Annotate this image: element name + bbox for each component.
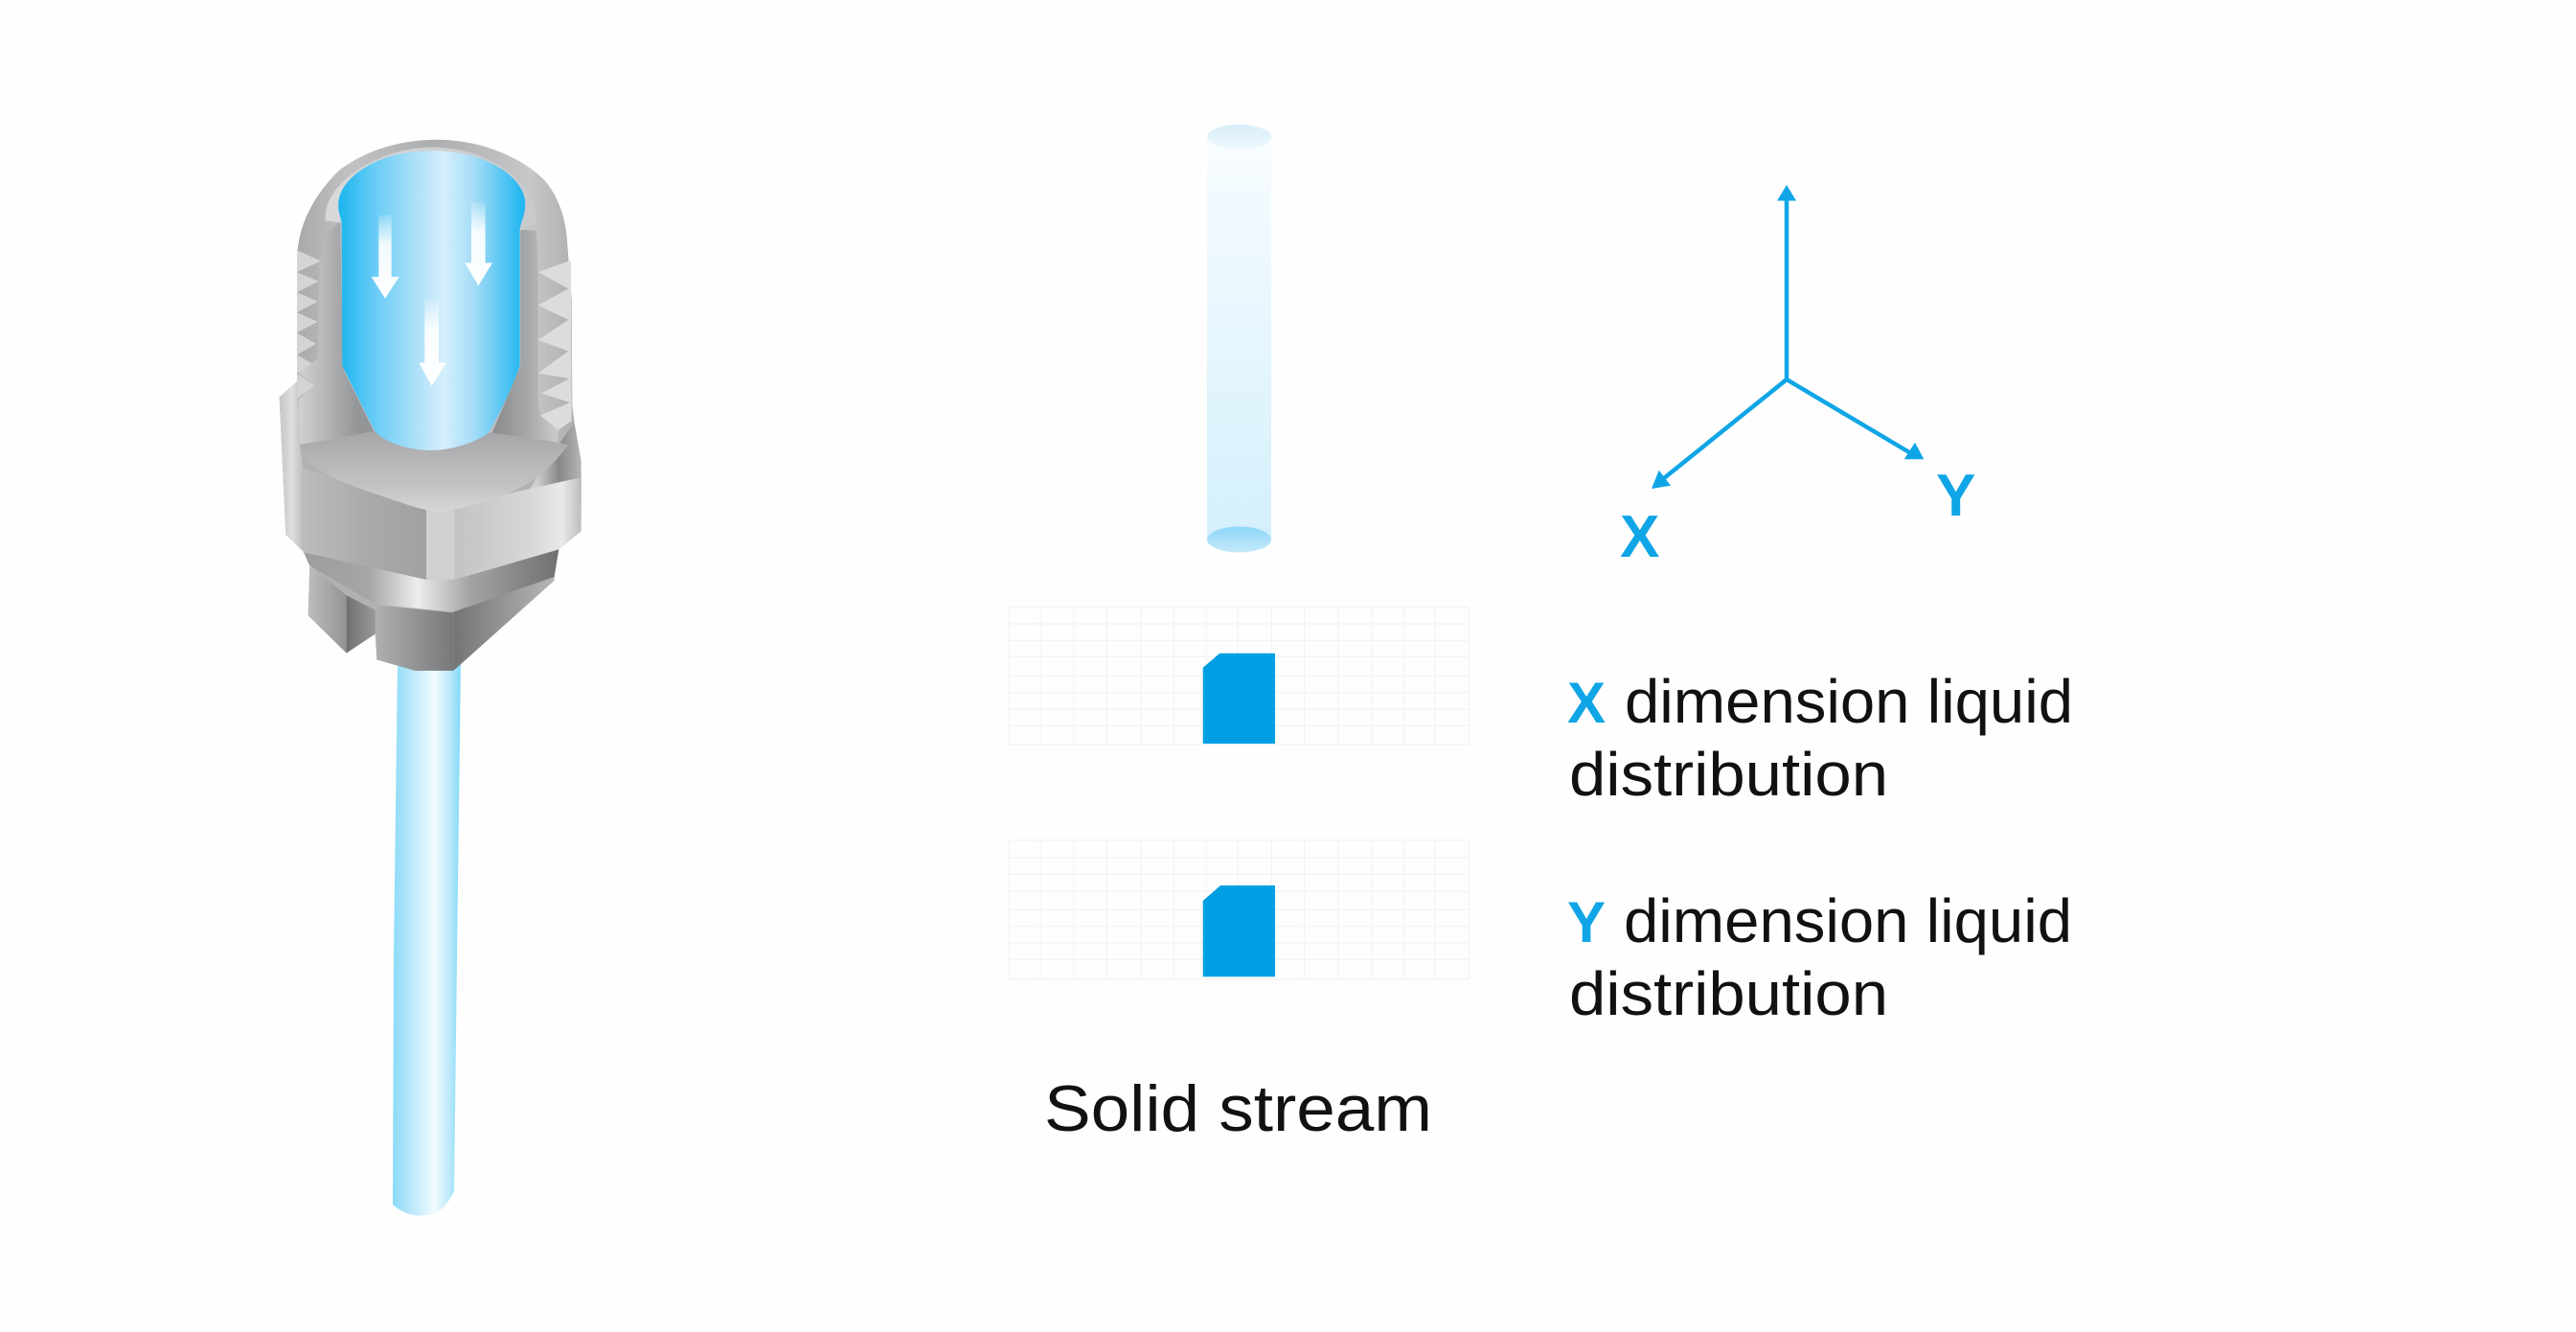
axis arrowheads	[1652, 185, 1924, 489]
dark wedge right	[524, 423, 581, 498]
slanted underside	[453, 577, 554, 671]
cylinder body	[1207, 136, 1271, 540]
spray cylinder	[1207, 125, 1271, 552]
right thread teeth	[538, 261, 572, 430]
hex nut center face	[426, 505, 455, 580]
leg notch shadow	[347, 595, 376, 654]
X dimension description	[1567, 667, 2073, 809]
hex nut outer left face	[280, 381, 305, 551]
nozzle silhouette backing	[280, 140, 581, 671]
blue Y letter: Y	[1567, 890, 1606, 954]
X line two: distribution	[1569, 740, 1888, 809]
Y axis label: Y	[1936, 463, 1975, 529]
axis lines	[1664, 196, 1909, 478]
nozzle illustration	[280, 140, 581, 671]
left leg	[308, 565, 347, 654]
water stream below nozzle	[393, 661, 461, 1216]
X axis label: X	[1620, 504, 1659, 570]
axis diagram	[1620, 185, 1975, 570]
left thread teeth	[297, 250, 321, 399]
cylinder bottom ellipse	[1207, 527, 1271, 552]
water chamber	[338, 150, 525, 450]
blue X letter: X	[1567, 671, 1606, 735]
flow arrows	[372, 202, 492, 386]
Y line two: distribution	[1569, 959, 1888, 1028]
hex nut left face	[304, 469, 441, 580]
Y dimension description	[1567, 886, 2072, 1028]
X distribution shape	[1203, 654, 1275, 744]
Y line one: dimension liquid	[1624, 886, 2072, 955]
hex nut top face	[300, 431, 568, 512]
X line one: dimension liquid	[1625, 667, 2073, 736]
nozzle collar	[304, 549, 559, 612]
heading: Solid stream: Solid stream	[1044, 1072, 1432, 1145]
X distribution chart	[1009, 607, 1469, 745]
front tip block	[376, 606, 453, 671]
cut-away section right	[491, 230, 559, 443]
Y distribution shape	[1203, 885, 1275, 976]
hex nut right face	[455, 478, 581, 580]
inner rim	[326, 148, 536, 231]
cut-away section left	[299, 222, 375, 445]
nozzle threaded body	[297, 140, 575, 447]
Y distribution chart	[1009, 840, 1469, 979]
cylinder top ellipse	[1207, 125, 1271, 149]
